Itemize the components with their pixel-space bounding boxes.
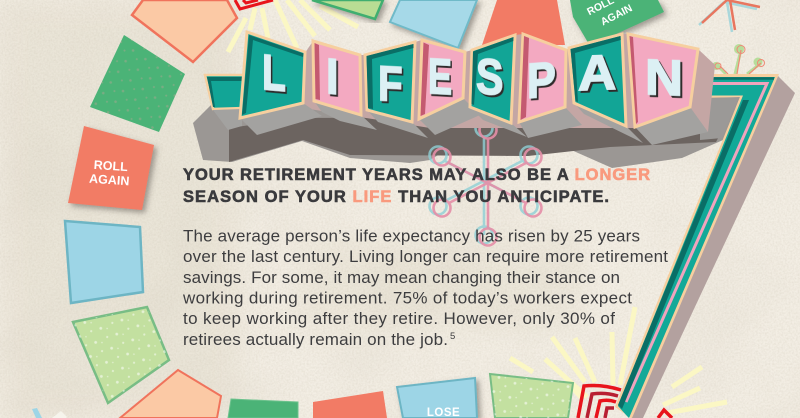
- letter block I: I: [326, 49, 338, 106]
- letter block A: A: [578, 44, 616, 101]
- letter block S: [470, 35, 515, 123]
- tile: light green top: [312, 0, 383, 19]
- red concentric arcs around the seven base: [578, 386, 672, 418]
- seven dark top stripe: [700, 77, 774, 80]
- seven teal band: [618, 77, 775, 418]
- sign side backing: [303, 34, 715, 132]
- letter block N: [628, 34, 698, 127]
- seven side face: [631, 76, 795, 418]
- letter block P: P: [527, 51, 556, 109]
- letter block L: [240, 32, 305, 118]
- back tile left: [205, 75, 244, 130]
- tile: green bottom: [228, 399, 298, 418]
- body text: The average person’s life expectancy has risen by 25 years: [183, 226, 640, 246]
- body text: [182, 226, 668, 349]
- letter block E: [419, 40, 465, 119]
- letter block E: E: [428, 49, 452, 106]
- letter block P: [519, 34, 566, 122]
- letter block A: [569, 34, 626, 126]
- icon: atom star top right: [699, 0, 760, 32]
- inner grey return: [700, 116, 730, 140]
- large seven: [615, 74, 795, 418]
- tile: roll again top right: [570, 0, 664, 46]
- tile: roll again left: ROLL: [93, 158, 129, 174]
- body text: 5: [450, 331, 455, 342]
- icon: antenna nodes above the seven: [712, 44, 764, 74]
- letter block F: [365, 42, 415, 122]
- icon: molecule hub: [430, 120, 542, 246]
- tile: light green bottom: [490, 374, 573, 418]
- tile: red concentric corner top: [235, 0, 273, 9]
- seven dark teal stripe: [618, 100, 749, 409]
- sun rays bottom: [510, 307, 727, 413]
- tile: peach bottom left: [120, 370, 221, 418]
- letter block N: N: [645, 49, 683, 106]
- seven front face border: [615, 74, 779, 418]
- body text: to keep working after they retire. However, only 30% of: [183, 309, 615, 328]
- tile: salmon top: [482, 0, 565, 45]
- tile: green upper left: [90, 35, 185, 132]
- tile: blue left: [65, 221, 143, 303]
- sun rays top: [228, 0, 358, 52]
- tile: roll again left: [68, 126, 154, 210]
- board path: game tiles: [32, 0, 664, 418]
- seven pink stripe: [626, 84, 767, 402]
- letter block I: [313, 41, 361, 115]
- tile fragments bottom left: [32, 408, 67, 418]
- heading: YOUR RETIREMENT YEARS MAY ALSO BE A LONGER: [183, 166, 650, 184]
- sign cast shadow: [193, 97, 740, 168]
- heading: [183, 166, 650, 206]
- lifespan sign: [205, 32, 715, 145]
- tile: roll again top right: AGAIN: [599, 2, 634, 28]
- body text: working during retirement. 75% of today’s workers expect: [182, 288, 632, 308]
- letter block L: L: [262, 43, 286, 102]
- tile: salmon bottom: [313, 391, 387, 418]
- tile: roll again left: AGAIN: [89, 172, 130, 188]
- tile: lose a turn: [397, 378, 477, 418]
- letter block S: S: [476, 48, 503, 106]
- tile: blue top: [390, 0, 477, 48]
- grey undersides of letter blocks: [240, 98, 708, 145]
- heading: SEASON OF YOUR LIFE THAN YOU ANTICIPATE.: [183, 188, 609, 206]
- body text: savings. For some, it may mean changing their stance on: [183, 268, 620, 287]
- tile: peach top left: [132, 0, 237, 62]
- body text: retirees actually remain on the job.: [183, 330, 448, 349]
- letter block F: F: [378, 55, 403, 112]
- body text: over the last century. Living longer can require more retirement: [183, 247, 668, 266]
- tile: light green left: [73, 307, 169, 403]
